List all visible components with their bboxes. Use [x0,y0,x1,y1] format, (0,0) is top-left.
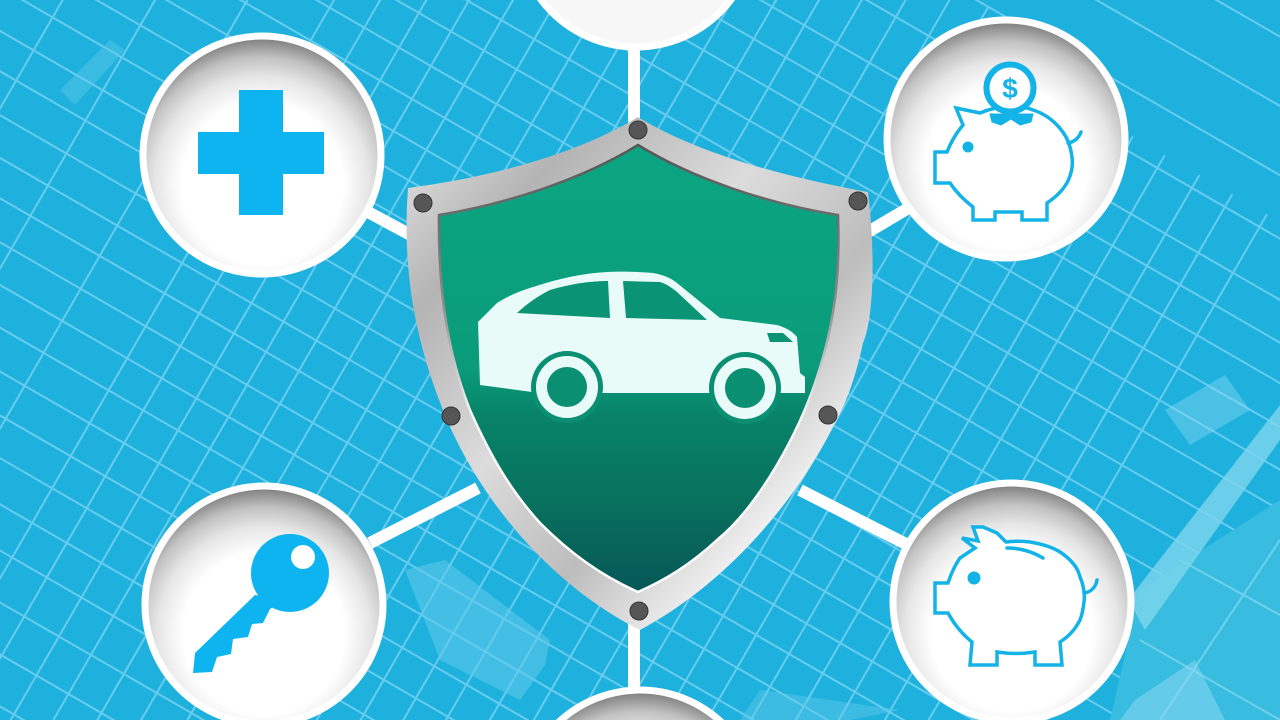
shield: green field [439,145,838,592]
icon: dollar sign on coin: $ [1002,73,1018,104]
shield: rivets [414,121,867,620]
connector lines [368,45,912,695]
circle: medical cross [143,36,381,274]
circle: key [145,486,383,720]
circle: top (cropped) [517,0,755,47]
circle: piggy bank [893,483,1131,720]
icon: key [193,534,329,673]
icon: medical cross [198,90,324,215]
icon: car [478,272,805,424]
circle: bottom (cropped) [521,690,759,720]
icon: piggy bank [935,527,1097,665]
icon: piggy bank with coin [935,64,1081,220]
shield [407,117,873,630]
circle: piggy bank with coin [887,20,1125,258]
shield: metal frame [407,117,873,630]
